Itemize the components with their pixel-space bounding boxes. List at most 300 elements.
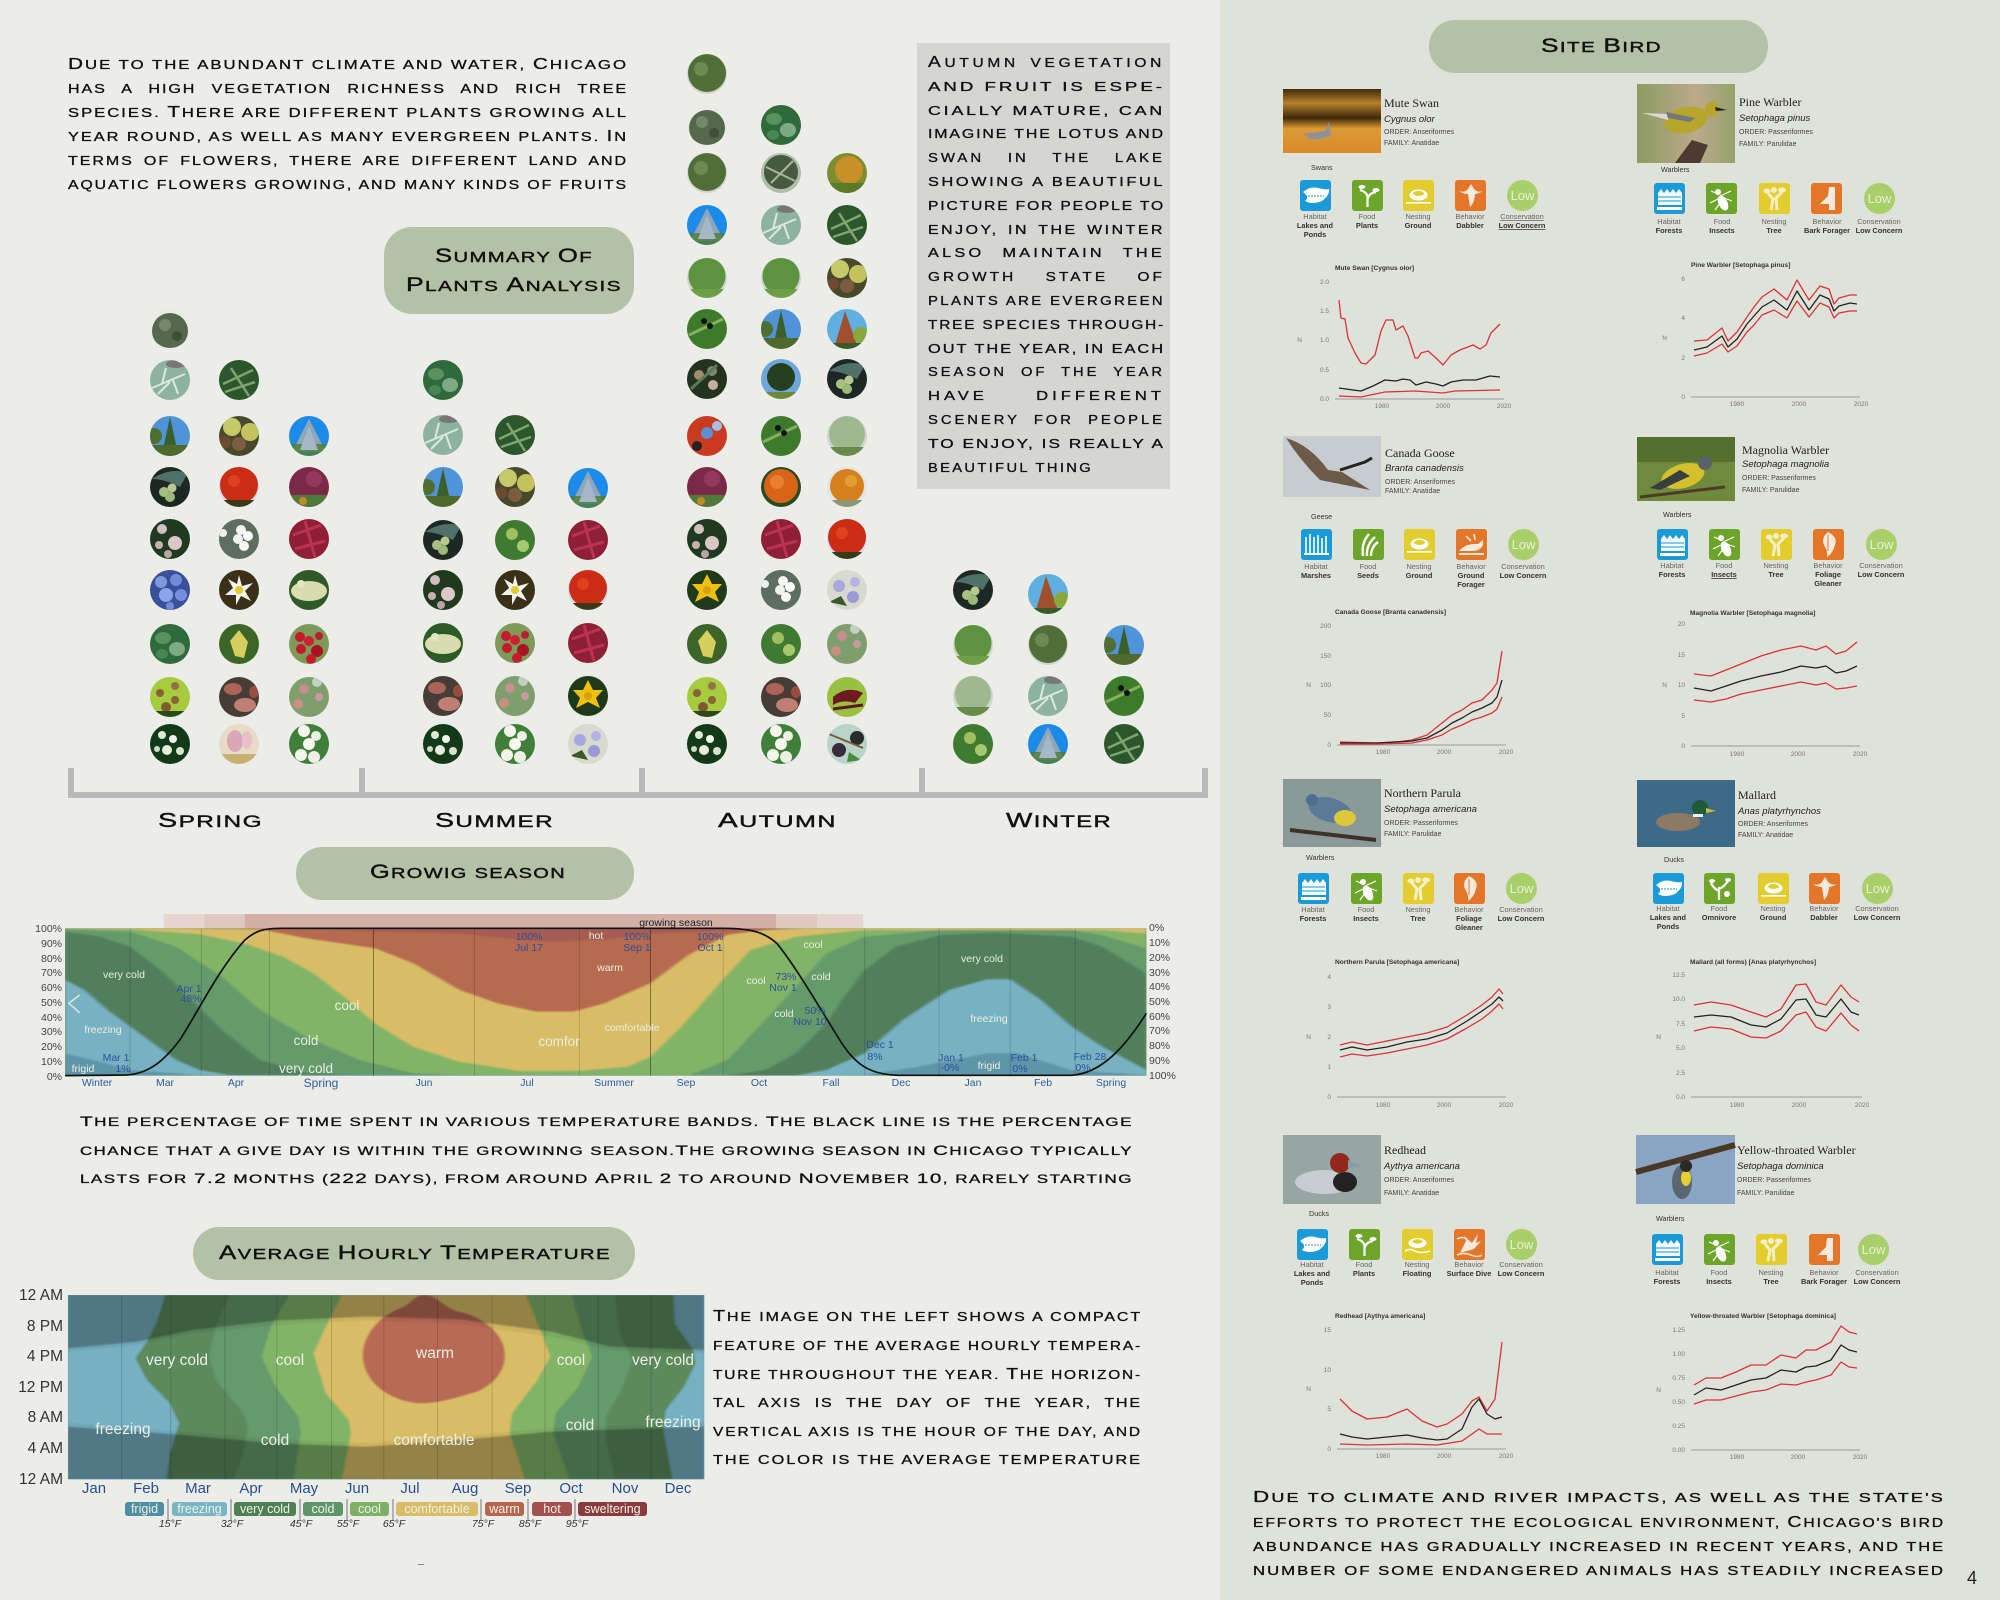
chart: average hourly temperature heatmap: Aug — [452, 1480, 478, 1497]
chart: average hourly temperature heatmap: 4 AM — [28, 1440, 63, 1457]
chart: average hourly temperature heatmap: cold — [261, 1432, 289, 1449]
habitat food nesting behavior conservation icons: Conservation — [1857, 217, 1901, 226]
species text: canada goose: Canada Goose — [1385, 446, 1455, 460]
chart: growing season temperature bands: cool — [746, 975, 766, 987]
habitat food nesting behavior conservation icons: Behavior — [1813, 561, 1843, 570]
trend chart: yellow-throated warbler: 0.50 — [1672, 1399, 1685, 1406]
habitat food nesting behavior conservation icons — [1298, 873, 1545, 932]
habitat food nesting behavior conservation icons: Seeds — [1357, 571, 1379, 580]
trend chart: redhead: 0 — [1327, 1446, 1331, 1453]
species text: redhead: Aythya americana — [1383, 1161, 1460, 1172]
legend: temperature bands — [125, 1499, 647, 1530]
species text: northern parula — [1384, 786, 1477, 838]
trend chart: mallard: 2020 — [1855, 1102, 1870, 1109]
group label: Geese — [1311, 512, 1332, 521]
species text: northern parula: FAMILY: Parulidae — [1384, 831, 1442, 838]
species text: mallard: Mallard — [1738, 788, 1776, 802]
chart: growing season temperature bands: Mar — [156, 1077, 175, 1089]
heading: summary of plants analysis — [384, 227, 634, 314]
plant photos: spring — [146, 308, 329, 764]
trend chart: mallard — [1656, 959, 1870, 1109]
habitat food nesting behavior conservation icons: Behavior — [1456, 562, 1486, 571]
trend chart: northern parula — [1306, 959, 1514, 1109]
chart: growing season temperature bands: Summer — [594, 1077, 634, 1089]
chart: growing season temperature bands: cool — [335, 998, 359, 1013]
chart: average hourly temperature heatmap — [18, 1287, 704, 1497]
habitat food nesting behavior conservation icons: Foliage — [1815, 570, 1841, 579]
trend chart: pine warbler: 2000 — [1792, 401, 1807, 408]
chart: average hourly temperature heatmap: warm — [415, 1345, 454, 1362]
chart: growing season temperature bands: 48% — [180, 993, 202, 1005]
trend chart: mute swan: 2.0 — [1320, 279, 1329, 286]
trend chart: canada goose: 200 — [1320, 623, 1331, 630]
heading: summary of plants analysis: P LANTS A NALYSIS — [406, 275, 622, 296]
chart: growing season temperature bands: 0% — [1075, 1062, 1091, 1074]
text block: autumn vegetation: GROWTH STATE OF — [928, 270, 1165, 284]
habitat food nesting behavior conservation icons: Food — [1716, 561, 1732, 570]
trend chart: yellow-throated warbler: 0.25 — [1672, 1423, 1685, 1430]
chart: growing season temperature bands: Mar 1 — [103, 1052, 130, 1064]
habitat food nesting behavior conservation icons: Floating — [1403, 1269, 1432, 1278]
trend chart: mallard: N — [1656, 1034, 1661, 1041]
trend chart: canada goose: N — [1306, 682, 1311, 689]
habitat food nesting behavior conservation icons: Ponds — [1657, 922, 1679, 931]
trend chart: northern parula: 2020 — [1499, 1102, 1514, 1109]
chart: growing season temperature bands: 10% — [1149, 937, 1170, 949]
chart: growing season temperature bands: Jan — [965, 1077, 982, 1089]
photo: canada goose — [1283, 436, 1381, 497]
trend chart: mallard: 1980 — [1730, 1102, 1745, 1109]
text block: autumn vegetation: PLANTS ARE EVERGREEN — [928, 294, 1165, 308]
chart: average hourly temperature heatmap: 12 PM — [18, 1379, 63, 1396]
chart: average hourly temperature heatmap: comfortable — [394, 1432, 474, 1449]
chart: growing season temperature bands: Jul — [520, 1077, 534, 1089]
species text: magnolia warbler: FAMILY: Parulidae — [1742, 487, 1800, 494]
habitat food nesting behavior conservation icons: Plants — [1356, 221, 1378, 230]
chart: growing season temperature bands: Sep 1 — [623, 942, 651, 954]
chart: growing season temperature bands: 60% — [1149, 1011, 1170, 1023]
habitat food nesting behavior conservation icons: Behavior — [1812, 217, 1842, 226]
habitat food nesting behavior conservation icons: Ground — [1458, 571, 1485, 580]
habitat food nesting behavior conservation icons: Ground — [1406, 571, 1433, 580]
text block: autumn vegetation: ALSO MAINTAIN THE — [928, 246, 1165, 260]
chart: average hourly temperature heatmap: Mar — [185, 1480, 211, 1497]
chart: growing season temperature bands: 40% — [1149, 981, 1170, 993]
text block: hourly temperature explanation: THE IMAGE ON THE LEFT SHOWS A COMPACT — [713, 1308, 1142, 1325]
habitat food nesting behavior conservation icons: Low Concern — [1498, 914, 1545, 923]
habitat food nesting behavior conservation icons: Nesting — [1758, 1268, 1784, 1277]
species text: northern parula: ORDER: Passeriformes — [1384, 820, 1458, 827]
trend chart: mallard: 5.0 — [1676, 1045, 1685, 1052]
habitat food nesting behavior conservation icons: Ponds — [1304, 230, 1326, 239]
trend chart: redhead: Redhead [Aythya americana] — [1335, 1313, 1425, 1320]
group label: Warblers — [1306, 853, 1335, 862]
text block: autumn vegetation: SHOWING A BEAUTIFUL — [928, 175, 1165, 189]
legend: temperature bands: freezing — [177, 1502, 222, 1516]
trend chart: magnolia warbler: 5 — [1681, 713, 1685, 720]
trend chart: magnolia warbler — [1662, 610, 1868, 758]
habitat food nesting behavior conservation icons: Habitat — [1301, 905, 1325, 914]
chart: growing season temperature bands: Sep — [677, 1077, 695, 1089]
text block: autumn vegetation: IMAGINE THE LOTUS AND — [928, 127, 1165, 141]
trend chart: mute swan: 2000 — [1436, 403, 1451, 410]
trend chart: canada goose: 0 — [1327, 742, 1331, 749]
trend chart: pine warbler: 1980 — [1730, 401, 1745, 408]
text block: autumn vegetation: HAVE DIFFERENT — [928, 389, 1165, 403]
habitat food nesting behavior conservation icons: Insects — [1711, 570, 1737, 579]
habitat food nesting behavior conservation icons: Behavior — [1454, 1260, 1484, 1269]
trend chart: northern parula: 2 — [1327, 1034, 1331, 1041]
habitat food nesting behavior conservation icons: Food — [1356, 1260, 1372, 1269]
trend chart: mute swan: 1.0 — [1320, 337, 1329, 344]
trend chart: northern parula: 3 — [1327, 1004, 1331, 1011]
chart: growing season temperature bands: 100% — [624, 931, 650, 943]
chart: growing season temperature bands: Oct — [751, 1077, 767, 1089]
chart: average hourly temperature heatmap: very cold — [632, 1352, 694, 1369]
species text: canada goose — [1385, 446, 1464, 495]
heading: average hourly temperature: A VERAGE H OURLY T EMPERATURE — [219, 1243, 611, 1264]
chart: growing season temperature bands: Spring — [1096, 1077, 1126, 1089]
habitat food nesting behavior conservation icons: Food — [1711, 1268, 1727, 1277]
trend chart: yellow-throated warbler: 0.75 — [1672, 1375, 1685, 1382]
habitat food nesting behavior conservation icons: Conservation — [1499, 1260, 1543, 1269]
species text: mallard: ORDER: Anseriformes — [1738, 821, 1809, 828]
legend: temperature bands: hot — [543, 1502, 561, 1516]
habitat food nesting behavior conservation icons: Habitat — [1657, 217, 1681, 226]
page number: 4 — [1967, 1568, 1977, 1588]
chart: growing season temperature bands: Winter — [82, 1077, 113, 1089]
text block: autumn vegetation: AND FRUIT IS ESPE- — [928, 80, 1165, 94]
trend chart: redhead: 5 — [1327, 1406, 1331, 1413]
species text: northern parula: Setophaga americana — [1384, 804, 1477, 815]
trend chart: mallard: 2.5 — [1676, 1070, 1685, 1077]
trend chart: canada goose: 2000 — [1437, 749, 1452, 756]
species text: yellow-throated warbler: FAMILY: Parulidae — [1737, 1190, 1795, 1197]
text block: growing season explanation: LASTS FOR 7.2 MONTHS ( 222 DAYS), FROM AROUND A PRIL 2 TO AROUND N OVEMBER 10 , RARELY STARTING — [80, 1170, 1133, 1186]
habitat food nesting behavior conservation icons — [1301, 529, 1547, 589]
legend: temperature bands: 65°F — [383, 1518, 406, 1530]
trend chart: mute swan: 0.0 — [1320, 396, 1329, 403]
habitat food nesting behavior conservation icons — [1657, 529, 1905, 588]
habitat food nesting behavior conservation icons: Ground — [1760, 913, 1787, 922]
trend chart: redhead: 10 — [1324, 1367, 1331, 1374]
species text: pine warbler: Pine Warbler — [1739, 95, 1801, 109]
species text: canada goose: FAMILY: Anatidae — [1385, 488, 1440, 495]
bird card: canada goose — [1283, 436, 1547, 756]
chart: growing season temperature bands: Jan 1 — [938, 1052, 964, 1064]
chart: growing season temperature bands: hot — [589, 930, 603, 942]
chart: average hourly temperature heatmap: Jun — [345, 1480, 369, 1497]
chart: growing season temperature bands: 50% — [1149, 996, 1170, 1008]
chart: growing season temperature bands: freezing — [970, 1013, 1008, 1025]
text block: hourly temperature explanation: FEATURE OF THE AVERAGE HOURLY TEMPERA- — [713, 1339, 1142, 1353]
chart: growing season temperature bands: Spring — [304, 1076, 338, 1090]
habitat food nesting behavior conservation icons: Gleaner — [1455, 923, 1483, 932]
habitat food nesting behavior conservation icons: Low Concern — [1498, 1269, 1545, 1278]
text block: growing season explanation: T HE PERCENTAGE OF TIME SPENT IN VARIOUS TEMPERATURE BANDS. T HE BLACK LINE IS THE PERCENTAGE — [80, 1113, 1133, 1129]
trend chart: canada goose: 150 — [1320, 653, 1331, 660]
chart: growing season temperature bands: freezing — [84, 1024, 122, 1036]
trend chart: mute swan: Mute Swan [Cygnus olor] — [1335, 265, 1414, 272]
chart: growing season temperature bands: frigid — [72, 1063, 95, 1075]
trend chart: yellow-throated warbler — [1656, 1313, 1868, 1461]
chart: growing season temperature bands: Jul 17 — [515, 942, 543, 954]
season labels: A UTUMN — [718, 810, 837, 832]
habitat food nesting behavior conservation icons: Low Concern — [1858, 570, 1905, 579]
heading: growing season: G ROWIG SEASON — [370, 862, 566, 883]
habitat food nesting behavior conservation icons: Behavior — [1809, 1268, 1839, 1277]
trend chart: redhead: N — [1306, 1386, 1311, 1393]
trend chart: canada goose — [1306, 609, 1514, 756]
chart: average hourly temperature heatmap: 4 PM — [27, 1348, 63, 1365]
trend chart: magnolia warbler: 20 — [1678, 621, 1685, 628]
habitat food nesting behavior conservation icons: Tree — [1763, 1277, 1779, 1286]
trend chart: pine warbler: 6 — [1681, 276, 1685, 283]
trend chart: mallard: 7.5 — [1676, 1021, 1685, 1028]
trend chart: redhead: 2000 — [1437, 1453, 1452, 1460]
trend chart: mallard: 0.0 — [1676, 1094, 1685, 1101]
habitat food nesting behavior conservation icons: Conservation — [1855, 1268, 1899, 1277]
chart: growing season temperature bands: 100% — [35, 923, 62, 935]
habitat food nesting behavior conservation icons: Low Concern — [1854, 1277, 1901, 1286]
heading: summary of plants analysis: S UMMARY O F — [435, 246, 593, 267]
text block: intro: YEAR ROUND, AS WELL AS MANY EVERGREEN PLANTS. IN — [68, 128, 628, 145]
trend chart: yellow-throated warbler: N — [1656, 1387, 1661, 1394]
habitat food nesting behavior conservation icons: Behavior — [1809, 904, 1839, 913]
trend chart: pine warbler: 4 — [1681, 315, 1685, 322]
habitat food nesting behavior conservation icons: Dabbler — [1810, 913, 1838, 922]
chart: average hourly temperature heatmap: freezing — [645, 1414, 701, 1431]
legend: temperature bands: 75°F — [472, 1518, 495, 1530]
text block: bird conclusion: ABUNDANCE HAS GRADUALLY INCREASED IN RECENT YEARS, AND THE — [1253, 1540, 1945, 1554]
text block: intro — [68, 56, 628, 192]
text block: bird conclusion: NUMBER OF SOME ENDANGERED ANIMALS HAS STEADILY INCREASED — [1253, 1564, 1945, 1578]
habitat food nesting behavior conservation icons: Habitat — [1655, 1268, 1679, 1277]
trend chart: mute swan: 2020 — [1497, 403, 1512, 410]
habitat food nesting behavior conservation icons: Nesting — [1406, 562, 1432, 571]
photo: magnolia warbler — [1637, 437, 1735, 501]
text block: hourly temperature explanation — [713, 1308, 1142, 1467]
legend: temperature bands: 85°F — [519, 1518, 542, 1530]
text block: autumn vegetation: SCENERY FOR PEOPLE — [928, 413, 1165, 427]
chart: growing season temperature bands: 100% — [1149, 1070, 1176, 1082]
habitat food nesting behavior conservation icons: Insects — [1709, 226, 1735, 235]
text block: growing season explanation: CHANCE THAT A GIVE DAY IS WITHIN THE GROWINNG SEASON. T HE GROWING SEASON IN C HICAGO TYPICALLY — [80, 1142, 1133, 1158]
season labels: S UMMER — [435, 810, 554, 832]
species text: yellow-throated warbler: ORDER: Passeriformes — [1737, 1177, 1811, 1184]
chart: average hourly temperature heatmap: Dec — [665, 1480, 692, 1497]
chart: average hourly temperature heatmap: Feb — [133, 1480, 159, 1497]
species text: redhead: Redhead — [1384, 1143, 1426, 1157]
trend chart: northern parula: 1980 — [1376, 1102, 1391, 1109]
chart: average hourly temperature heatmap: 8 PM — [27, 1318, 63, 1335]
habitat food nesting behavior conservation icons: Food — [1714, 217, 1730, 226]
chart: average hourly temperature heatmap: Jan — [82, 1480, 106, 1497]
trend chart: mallard: 2000 — [1792, 1102, 1807, 1109]
habitat food nesting behavior conservation icons: Omnivore — [1702, 913, 1736, 922]
habitat food nesting behavior conservation icons: Gleaner — [1814, 579, 1842, 588]
chart: growing season temperature bands: 80% — [1149, 1040, 1170, 1052]
chart: growing season temperature bands: Oct 1 — [697, 942, 723, 954]
legend: temperature bands: sweltering — [584, 1502, 641, 1516]
trend chart: pine warbler: N — [1662, 335, 1667, 342]
species text: magnolia warbler — [1742, 443, 1829, 494]
habitat food nesting behavior conservation icons: Nesting — [1760, 904, 1786, 913]
chart: growing season temperature bands — [35, 914, 1176, 1090]
trend chart: magnolia warbler: 1980 — [1730, 751, 1745, 758]
season labels: W INTER — [1006, 810, 1112, 832]
chart: growing season temperature bands: very cold — [279, 1061, 333, 1076]
trend chart: yellow-throated warbler: 0.00 — [1672, 1447, 1685, 1454]
habitat food nesting behavior conservation icons: Forests — [1659, 570, 1685, 579]
text block: intro: SPECIES. T HERE ARE DIFFERENT PLANTS GROWING ALL — [68, 104, 628, 121]
chart: growing season temperature bands: growing season — [639, 917, 713, 929]
habitat food nesting behavior conservation icons: Marshes — [1301, 571, 1331, 580]
habitat food nesting behavior conservation icons: Foliage — [1456, 914, 1482, 923]
species text: magnolia warbler: ORDER: Passeriformes — [1742, 475, 1816, 482]
habitat food nesting behavior conservation icons: Ponds — [1301, 1278, 1323, 1287]
chart: growing season temperature bands: 100% — [516, 931, 542, 943]
text block: intro: TERMS OF FLOWERS, THERE ARE DIFFERENT LAND AND — [68, 154, 628, 168]
group label: Swans — [1311, 163, 1333, 172]
habitat food nesting behavior conservation icons: Lakes and — [1297, 221, 1334, 230]
chart: growing season temperature bands: Fall — [823, 1077, 839, 1089]
habitat food nesting behavior conservation icons: Nesting — [1404, 1260, 1430, 1269]
trend chart: redhead: 1980 — [1376, 1453, 1391, 1460]
chart: average hourly temperature heatmap: May — [290, 1480, 319, 1497]
heading: average hourly temperature — [193, 1227, 635, 1280]
small mark below legend — [418, 1564, 424, 1565]
habitat food nesting behavior conservation icons: Food — [1358, 905, 1374, 914]
photo: mute swan — [1283, 89, 1381, 153]
heading: growing season — [296, 847, 634, 900]
habitat food nesting behavior conservation icons: Forager — [1457, 580, 1485, 589]
habitat food nesting behavior conservation icons: Food — [1360, 562, 1376, 571]
species text: mute swan: Cygnus olor — [1384, 114, 1436, 125]
habitat food nesting behavior conservation icons: Bark Forager — [1804, 226, 1850, 235]
species text: mallard: Anas platyrhynchos — [1737, 806, 1821, 817]
species text: redhead — [1383, 1143, 1460, 1197]
chart: growing season temperature bands: 50% — [804, 1005, 826, 1017]
trend chart: northern parula: 1 — [1327, 1064, 1331, 1071]
season labels: S PRING — [158, 810, 263, 832]
habitat food nesting behavior conservation icons: Habitat — [1303, 212, 1327, 221]
trend chart: northern parula: 4 — [1327, 974, 1331, 981]
species text: mute swan — [1384, 96, 1455, 147]
text block: autumn vegetation: CIALLY MATURE, CAN — [928, 104, 1165, 118]
chart: growing season temperature bands: cool — [803, 939, 823, 951]
chart: growing season temperature bands: 70% — [41, 967, 62, 979]
trend chart: yellow-throated warbler: 2000 — [1791, 1454, 1806, 1461]
trend chart: yellow-throated warbler: 1980 — [1730, 1454, 1745, 1461]
trend chart: mallard: 10.0 — [1672, 996, 1685, 1003]
habitat food nesting behavior conservation icons: Lakes and — [1650, 913, 1687, 922]
trend chart: yellow-throated warbler: 1.25 — [1672, 1327, 1685, 1334]
trend chart: pine warbler — [1662, 262, 1869, 408]
trend chart: northern parula: N — [1306, 1034, 1311, 1041]
habitat food nesting behavior conservation icons — [1294, 1229, 1545, 1287]
habitat food nesting behavior conservation icons: Food — [1711, 904, 1727, 913]
chart: growing season temperature bands: 73% — [775, 971, 797, 983]
photo: yellow-throated warbler — [1636, 1135, 1735, 1204]
chart: average hourly temperature heatmap: 8 AM — [28, 1409, 63, 1426]
chart: growing season temperature bands: 90% — [1149, 1055, 1170, 1067]
chart: growing season temperature bands: 8% — [867, 1051, 883, 1063]
plant photos: autumn — [687, 54, 869, 764]
chart: growing season temperature bands: Nov 10 — [793, 1016, 827, 1028]
chart: growing season temperature bands: Dec 1 — [866, 1039, 894, 1051]
trend chart: magnolia warbler: 15 — [1678, 652, 1685, 659]
trend chart: magnolia warbler: 0 — [1681, 743, 1685, 750]
chart: growing season temperature bands: Feb 1 — [1011, 1052, 1038, 1064]
trend chart: mute swan: 0.5 — [1320, 367, 1329, 374]
chart: growing season temperature bands: 30% — [1149, 967, 1170, 979]
chart: growing season temperature bands: 30% — [41, 1026, 62, 1038]
bracket axis for seasons — [71, 768, 1205, 795]
chart: average hourly temperature heatmap: Oct — [559, 1480, 583, 1497]
habitat food nesting behavior conservation icons: Surface Dive — [1447, 1269, 1491, 1278]
habitat food nesting behavior conservation icons: Conservation — [1855, 904, 1899, 913]
trend chart: yellow-throated warbler: Yellow-throated Warbler [Setophaga dominica] — [1690, 1313, 1836, 1320]
habitat food nesting behavior conservation icons: Habitat — [1300, 1260, 1324, 1269]
photo: pine warbler — [1637, 84, 1735, 163]
habitat food nesting behavior conservation icons: Tree — [1768, 570, 1784, 579]
text block: autumn vegetation: OUT THE YEAR, IN EACH — [928, 342, 1165, 356]
legend: temperature bands: 55°F — [337, 1518, 360, 1530]
chart: growing season temperature bands: very cold — [961, 953, 1003, 965]
group label: Ducks — [1664, 855, 1684, 864]
trend chart: yellow-throated warbler: 2020 — [1853, 1454, 1868, 1461]
species text: mute swan: ORDER: Anseriformes — [1384, 129, 1455, 136]
habitat food nesting behavior conservation icons: Conservation — [1859, 561, 1903, 570]
chart: average hourly temperature heatmap: very cold — [146, 1352, 208, 1369]
bird card: magnolia warbler — [1637, 437, 1905, 758]
legend: temperature bands: cold — [312, 1502, 335, 1516]
plant photos: summer — [419, 360, 608, 764]
chart: average hourly temperature heatmap: cool — [557, 1352, 585, 1369]
trend chart: magnolia warbler: Magnolia Warbler [Setophaga magnolia] — [1690, 610, 1815, 617]
season labels — [158, 810, 1112, 832]
chart: growing season temperature bands: 80% — [41, 953, 62, 965]
species text: magnolia warbler: Setophaga magnolia — [1742, 459, 1829, 470]
bird card: redhead — [1283, 1135, 1545, 1460]
chart: average hourly temperature heatmap: cold — [566, 1417, 594, 1434]
trend chart: northern parula: 0 — [1327, 1094, 1331, 1101]
trend chart: redhead — [1306, 1313, 1514, 1460]
text block: autumn vegetation: SWAN IN THE LAKE — [928, 151, 1165, 165]
legend: temperature bands: warm — [488, 1502, 520, 1516]
trend chart: canada goose: 100 — [1320, 682, 1331, 689]
text block: intro: HAS A HIGH VEGETATION RICHNESS AND RICH TREE — [68, 82, 628, 96]
trend chart: magnolia warbler: 2000 — [1791, 751, 1806, 758]
habitat food nesting behavior conservation icons: Forests — [1656, 226, 1682, 235]
text block: bird conclusion — [1253, 1489, 1945, 1578]
text block: autumn vegetation: TO ENJOY, IS REALLY A — [928, 437, 1165, 451]
habitat food nesting behavior conservation icons: Habitat — [1656, 904, 1680, 913]
habitat food nesting behavior conservation icons: Tree — [1766, 226, 1782, 235]
chart: growing season temperature bands: 1% — [115, 1063, 131, 1075]
group label: Warblers — [1656, 1214, 1685, 1223]
chart: growing season temperature bands: frigid — [978, 1060, 1001, 1072]
habitat food nesting behavior conservation icons: Behavior — [1455, 212, 1485, 221]
habitat food nesting behavior conservation icons: Nesting — [1405, 212, 1431, 221]
species text: pine warbler: FAMILY: Parulidae — [1739, 141, 1797, 148]
habitat food nesting behavior conservation icons: Nesting — [1761, 217, 1787, 226]
legend: temperature bands: very cold — [240, 1502, 290, 1516]
chart: growing season temperature bands: 10% — [41, 1056, 62, 1068]
trend chart: magnolia warbler: 2020 — [1853, 751, 1868, 758]
species text: pine warbler: ORDER: Passeriformes — [1739, 129, 1813, 136]
